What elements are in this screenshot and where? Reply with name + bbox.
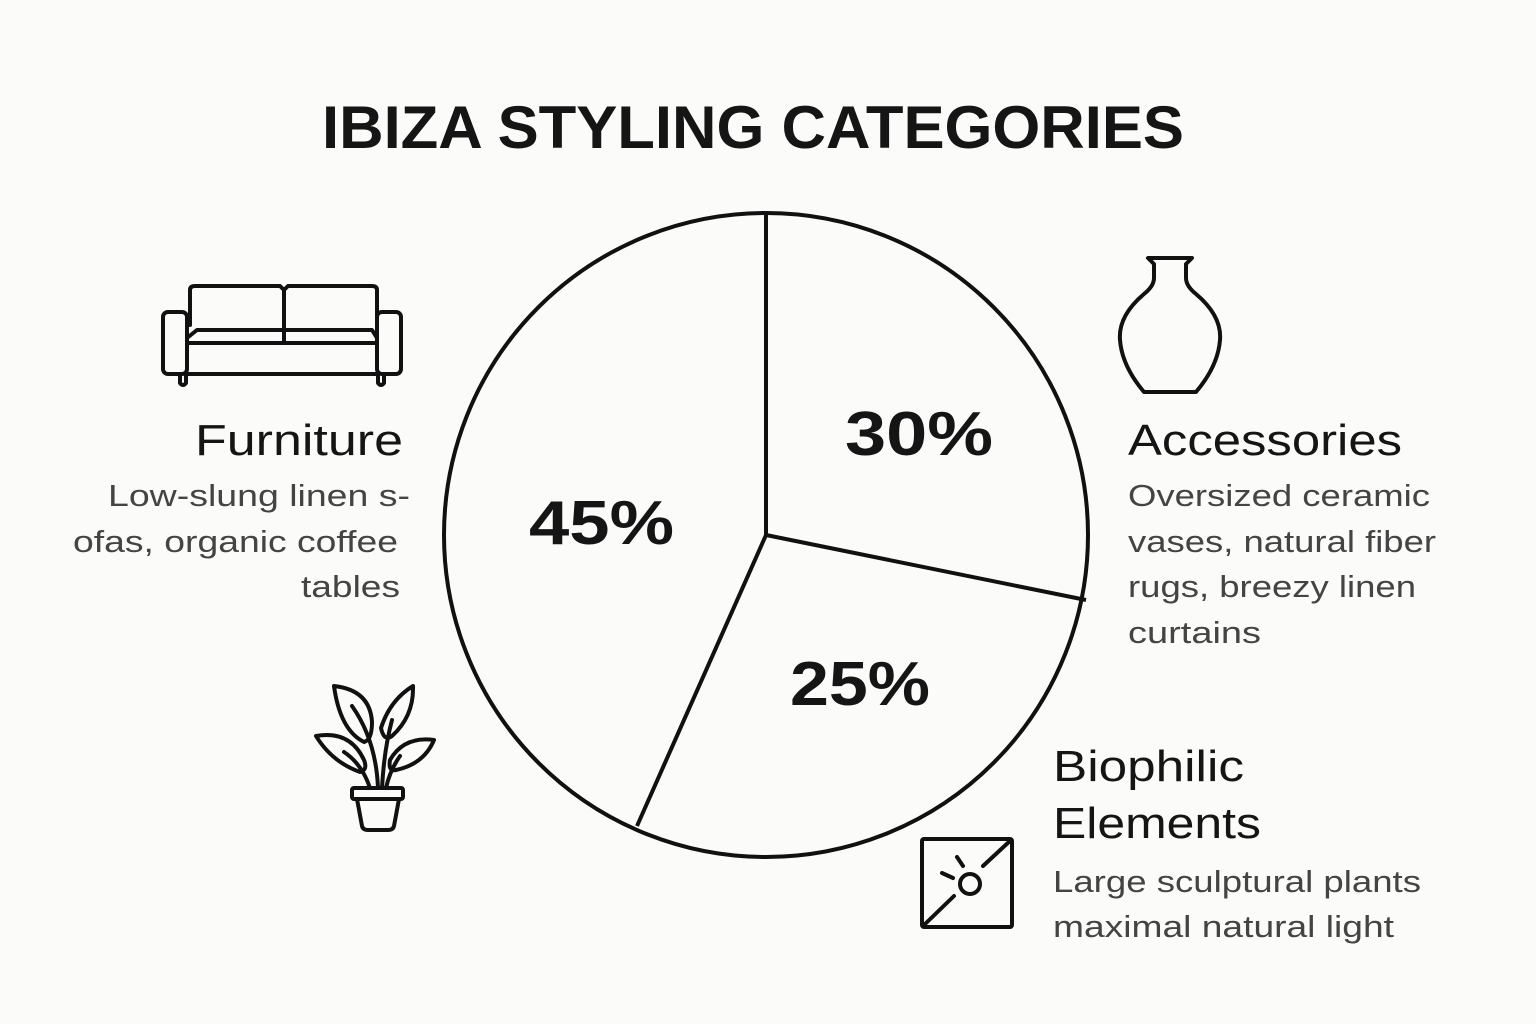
text: accessories description: curtains	[1128, 615, 1261, 650]
text: furniture description: Low-slung linen s-	[108, 478, 410, 513]
icon: vase	[1120, 258, 1220, 392]
pie chart	[444, 213, 1088, 857]
text: accessories description: rugs, breezy linen	[1128, 569, 1416, 604]
text: accessories description: vases, natural fiber	[1128, 524, 1436, 559]
text: furniture description: ofas, organic coffee	[73, 524, 398, 559]
heading: Furniture: Furniture	[195, 416, 403, 465]
heading: Accessories: Accessories	[1128, 416, 1402, 465]
heading: Biophilic Elements: Biophilic	[1053, 742, 1244, 791]
label: 45%: 45%	[529, 489, 674, 558]
heading: Biophilic Elements	[1053, 742, 1261, 848]
icon: plant	[316, 686, 434, 830]
title: IBIZA STYLING CATEGORIES	[322, 94, 1184, 161]
text: accessories description: Oversized ceramic	[1128, 478, 1430, 513]
text: furniture description: tables	[301, 569, 400, 604]
label: 25%: 25%	[790, 650, 930, 719]
text: accessories description	[1128, 478, 1436, 650]
heading: Biophilic Elements: Elements	[1053, 799, 1261, 848]
text: biophilic description: Large sculptural plants	[1053, 864, 1421, 899]
text: biophilic description: maximal natural light	[1053, 909, 1394, 944]
icon: sofa	[163, 286, 401, 385]
text: biophilic description	[1053, 864, 1421, 944]
label: 30%: 30%	[845, 400, 993, 469]
icon: window with sun	[922, 839, 1012, 927]
text: furniture description	[73, 478, 410, 604]
